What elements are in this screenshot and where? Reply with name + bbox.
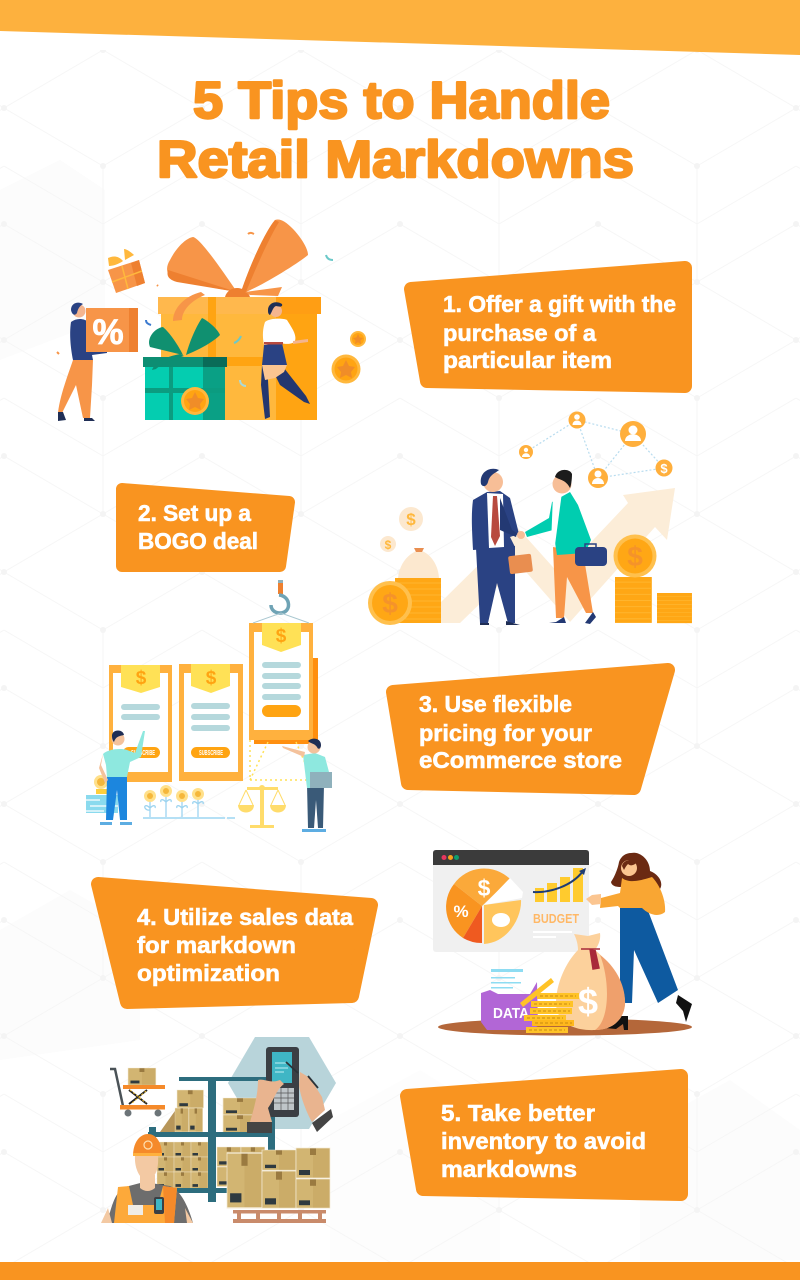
callout 5: 5. Take better [441, 1100, 595, 1126]
title: 5 Tips to Handle [193, 72, 610, 130]
people network: $ [660, 461, 668, 476]
coin plants [143, 785, 235, 818]
illustration: budget data dashboard [433, 850, 692, 1036]
callout 4: for markdown [137, 932, 296, 958]
crane hook [253, 580, 309, 623]
coins and money bag left: $ [382, 588, 398, 619]
callout 5: markdowns [441, 1156, 577, 1182]
coins and money bag left: $ [406, 510, 416, 529]
callout 1 [411, 268, 685, 386]
ground ellipse [438, 1018, 692, 1036]
pallet [233, 1210, 326, 1223]
pricing card middle: $ [206, 668, 217, 689]
man carrying percent box [58, 303, 138, 421]
coins and money bag left: $ [385, 538, 392, 552]
woman with budget [586, 853, 692, 1030]
browser window [433, 850, 589, 952]
pricing card left [109, 665, 172, 782]
big orange gift [158, 219, 321, 420]
callout 5: inventory to avoid [441, 1128, 646, 1154]
data folder [481, 969, 538, 1030]
callout 4: optimization [137, 960, 280, 986]
gold coins and ruler [520, 978, 579, 1033]
money bag [556, 933, 625, 1030]
star coins [332, 331, 366, 384]
coin stacks right: $ [627, 541, 643, 572]
callout 3: 3. Use flexible [419, 691, 572, 717]
confetti [57, 233, 333, 386]
callout 4 [98, 884, 371, 1002]
data folder: DATA [493, 1005, 529, 1022]
illustration: flexible pricing cards [84, 580, 332, 832]
hanging pricing card: $ [276, 626, 287, 647]
title: Retail Markdowns [157, 131, 634, 189]
money bag: $ [578, 981, 598, 1022]
callout 3: pricing for your [419, 720, 592, 746]
growth arrow [440, 488, 675, 623]
pie chart [446, 868, 523, 944]
callout 4: 4. Utilize sales data [137, 904, 353, 930]
pie chart: $ [478, 875, 491, 901]
foreground boxes [227, 1148, 330, 1208]
background boxes [157, 1090, 265, 1188]
illustration: handshake and coins [368, 412, 692, 625]
callout 2: BOGO deal [138, 528, 258, 554]
people network [519, 412, 672, 488]
teal shelving [148, 1077, 275, 1202]
bottom orange band [0, 1262, 800, 1280]
illustration: gift boxes and shoppers [57, 219, 366, 421]
dancing woman [261, 302, 310, 419]
pricing card middle: SUBSCRIBE [199, 750, 223, 757]
callout 5 [407, 1076, 681, 1194]
man pointing left [99, 730, 145, 825]
small flying gift [108, 249, 145, 293]
callout 1: 1. Offer a gift with the [443, 291, 676, 317]
dotted projection lines [250, 740, 310, 780]
businessman right [525, 470, 607, 624]
top orange band [0, 0, 800, 55]
warehouse worker [101, 1134, 193, 1223]
callout 2: 2. Set up a [138, 500, 251, 526]
businessman left [472, 469, 533, 625]
man pointing right [282, 739, 332, 832]
handshake hands [517, 531, 525, 539]
callout 3 [393, 670, 668, 788]
callout 1: particular item [443, 347, 612, 373]
pie chart: % [453, 902, 469, 921]
balance scale [238, 785, 286, 828]
coin stacks right [614, 534, 692, 623]
money pile [84, 775, 118, 813]
man carrying percent box: % [92, 313, 124, 352]
hanging pricing card [249, 623, 318, 744]
pricing card middle [179, 664, 243, 781]
illustration: warehouse inventory [101, 1037, 336, 1223]
hands with scanner [247, 1047, 333, 1133]
green gift [143, 318, 227, 420]
lift cart [110, 1068, 165, 1116]
pricing card left: SUBSCRIBE [131, 750, 155, 757]
pricing card left: $ [136, 668, 147, 689]
callout 2 [122, 489, 289, 566]
coins and money bag left [368, 507, 441, 625]
callout 1: purchase of a [443, 320, 596, 346]
callout 3: eCommerce store [419, 747, 622, 773]
title [157, 72, 634, 189]
hexagon backdrop [228, 1037, 336, 1129]
budget bars [533, 868, 586, 938]
budget bars: BUDGET [533, 912, 579, 926]
